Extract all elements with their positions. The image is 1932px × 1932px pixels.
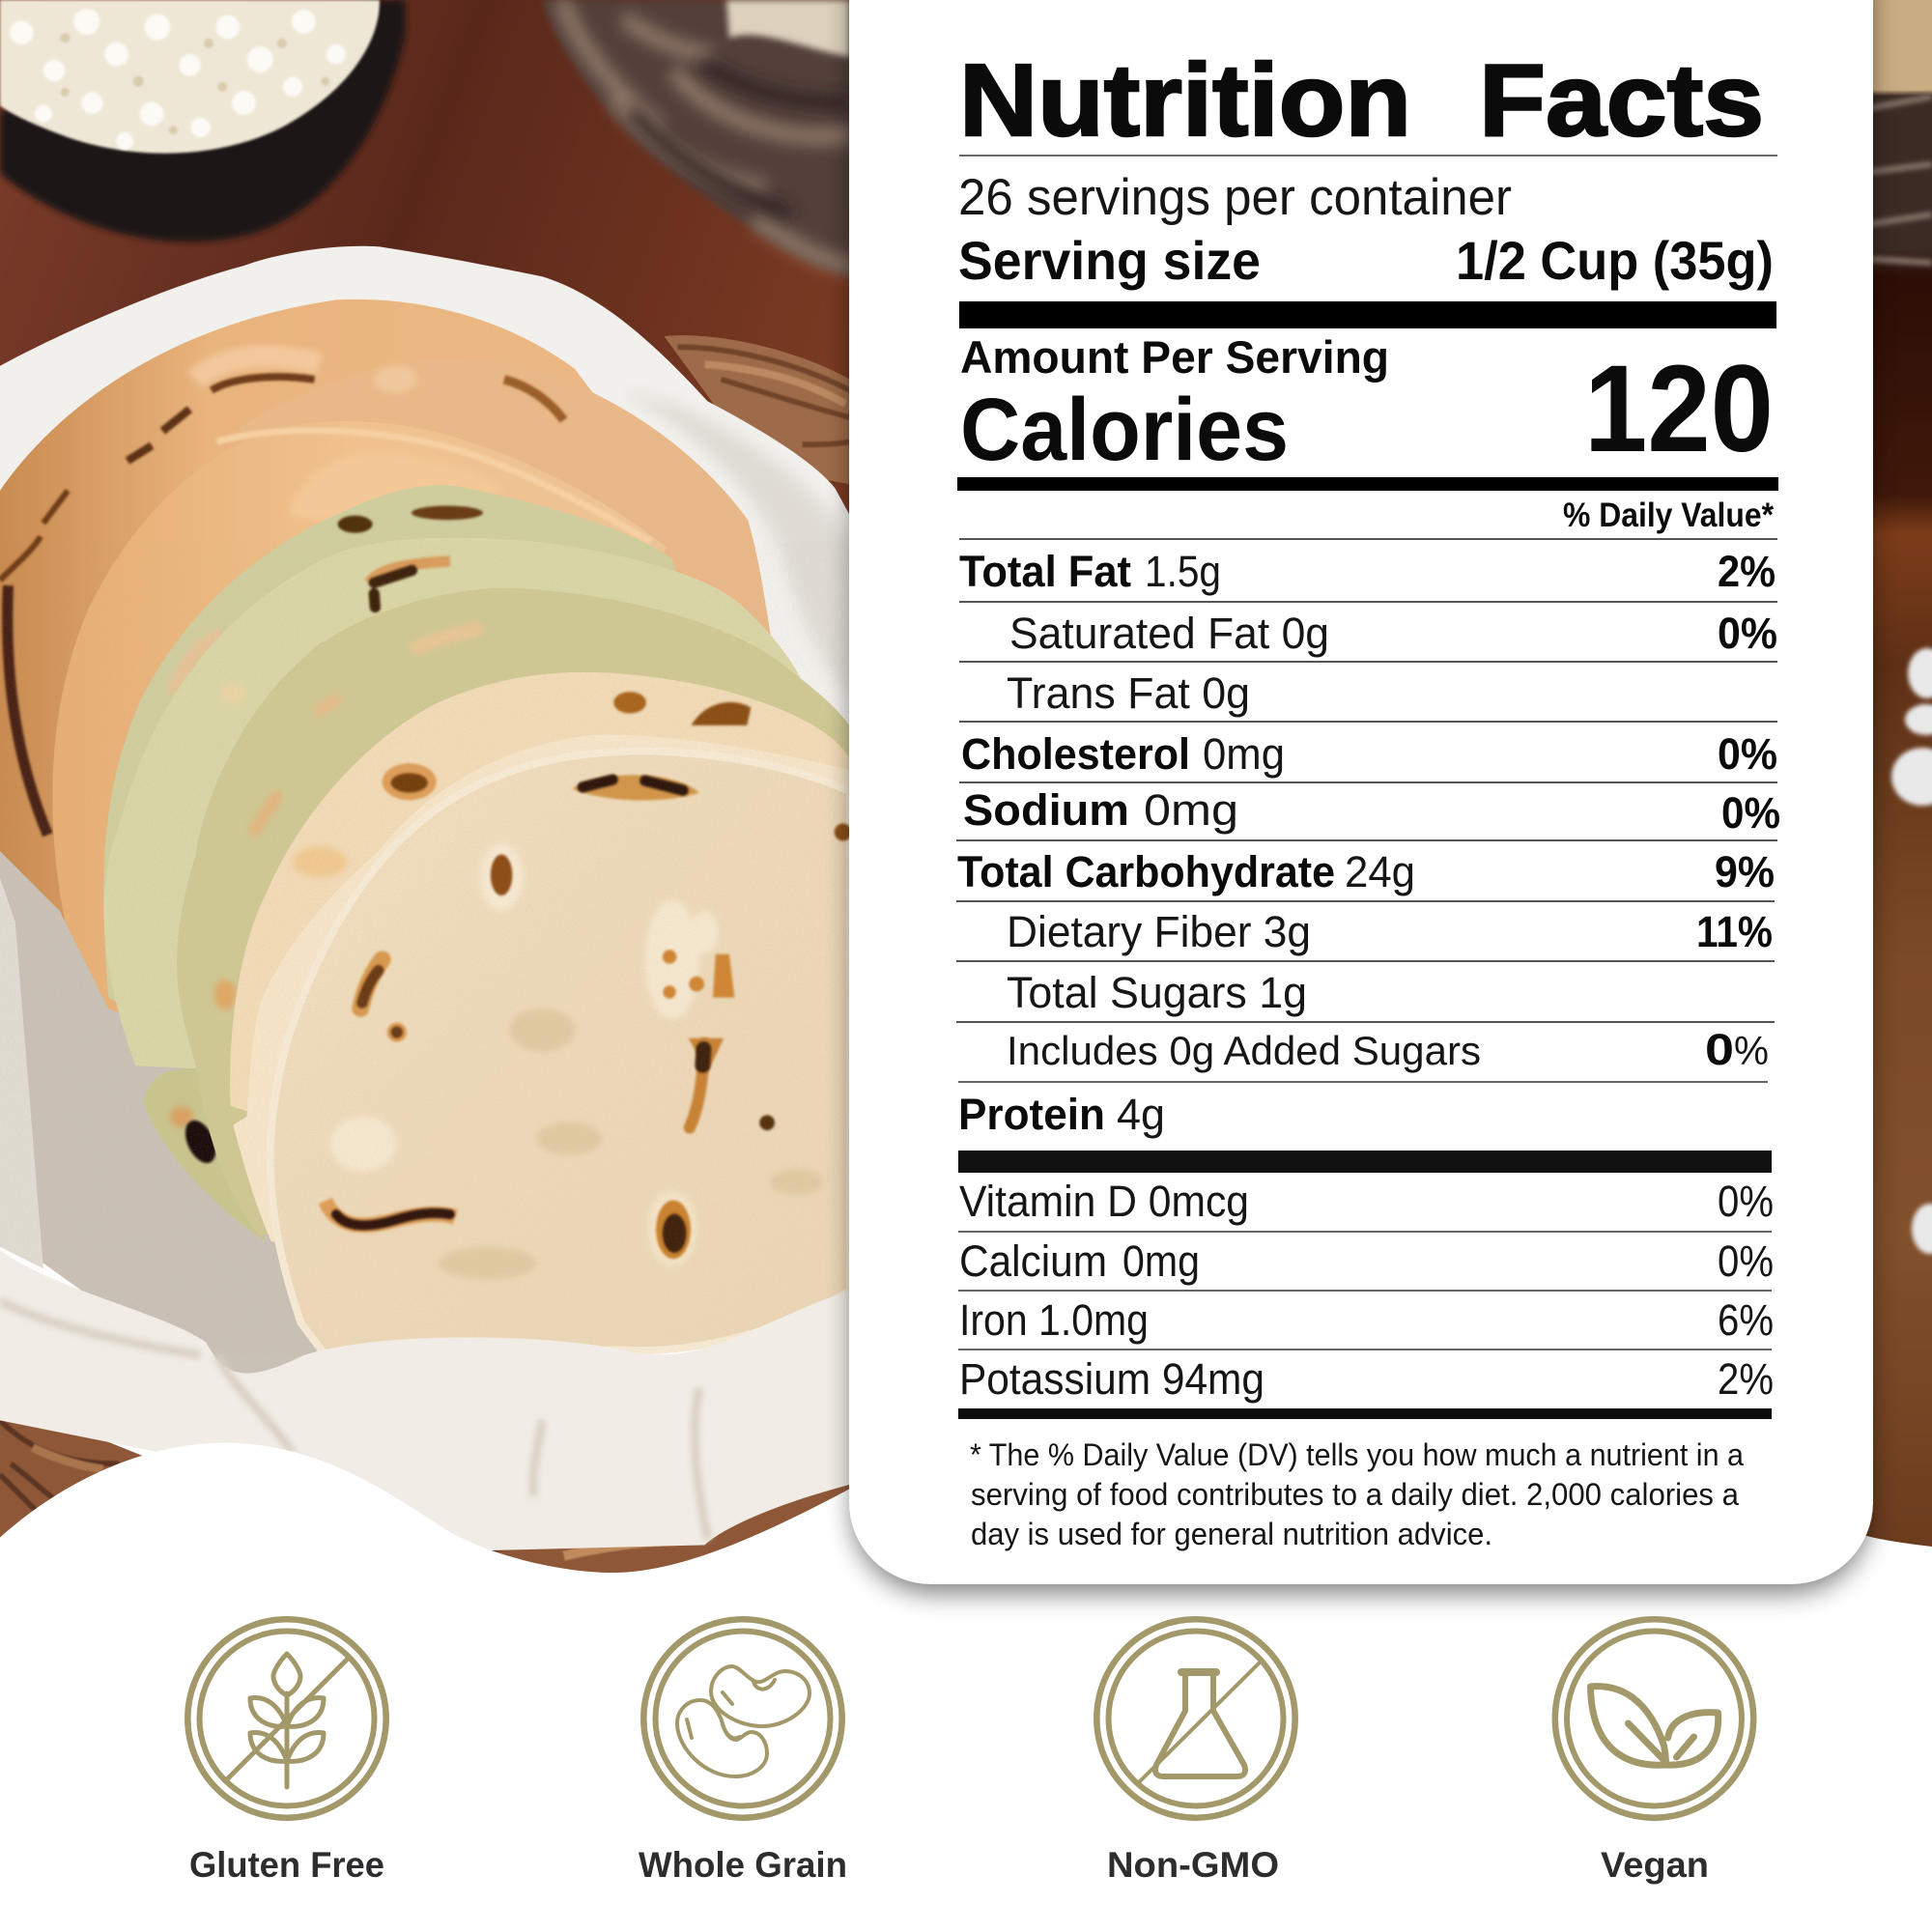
row: total fat — [959, 547, 1776, 596]
row: calcium: 0% — [1718, 1236, 1774, 1286]
row: sodium — [963, 785, 1780, 838]
row: saturated fat: Saturated Fat 0g — [1009, 609, 1329, 658]
row: dietary fiber: 11% — [1696, 907, 1773, 956]
small green tortilla with burn — [144, 1068, 266, 1241]
title — [959, 43, 1764, 157]
row: iron: Iron 1.0mg — [959, 1295, 1149, 1345]
row: cholesterol: 0% — [1718, 729, 1777, 779]
calories: Calories — [960, 381, 1289, 479]
front cloth liner — [0, 1250, 867, 1550]
row: total carbohydrate: 9% — [1715, 847, 1775, 896]
icon: non-gmo flask — [1096, 1619, 1295, 1818]
icon: vegan leaves — [1555, 1619, 1753, 1818]
row: saturated fat: 0% — [1718, 609, 1777, 658]
row: dietary fiber — [1007, 907, 1773, 956]
third green tortilla — [177, 588, 850, 1236]
nutrition card drop shadow — [851, 0, 1871, 1594]
footnote — [970, 1437, 1744, 1551]
row: cholesterol: Cholesterol — [961, 729, 1190, 779]
row: sodium: 0mg — [1144, 785, 1238, 835]
row: calcium: 0mg — [1122, 1236, 1200, 1286]
woven basket, front rim — [0, 1420, 849, 1573]
tortilla grain texture — [0, 542, 850, 1355]
calories — [960, 340, 1774, 479]
daily value header: % Daily Value* — [1563, 497, 1774, 534]
blurred basket in the background — [542, 0, 867, 276]
cloth shading near the tortillas — [641, 396, 849, 689]
panel: nutrition facts card — [849, 0, 1873, 1584]
shaded inner cloth — [0, 851, 318, 1374]
footnote: serving of food contributes to a daily diet. 2,000 calories a — [971, 1477, 1739, 1512]
row: total fat: 2% — [1718, 547, 1776, 596]
row: calcium — [959, 1236, 1774, 1286]
woven basket rim, right side — [665, 335, 849, 485]
row: added sugars — [1007, 1025, 1769, 1074]
footnote: * The % Daily Value (DV) tells you how much a nutrient in a — [970, 1437, 1744, 1472]
amount per serving: Amount Per Serving — [960, 331, 1389, 383]
label: non-gmo: Non-GMO — [1107, 1845, 1279, 1885]
row: cholesterol — [961, 729, 1777, 779]
back orange tortilla — [0, 299, 593, 1012]
row: trans fat: Trans Fat 0g — [1007, 668, 1250, 718]
row: protein: Protein — [958, 1090, 1105, 1139]
white cloth liner, back — [0, 245, 849, 725]
row: protein: 4g — [1117, 1090, 1165, 1139]
photo: basket of corn tortillas on a wooden table — [0, 0, 895, 1681]
row: total fat: Total Fat — [959, 547, 1131, 596]
third orange tortilla — [52, 421, 667, 1030]
icon: whole grain beans — [643, 1619, 842, 1818]
row: potassium: 2% — [1718, 1354, 1774, 1404]
row: total carbohydrate: Total Carbohydrate — [957, 847, 1335, 896]
white wave divider — [0, 1443, 867, 1600]
left cloth fold — [0, 878, 43, 1268]
servings per container: 26 servings per container — [958, 169, 1512, 226]
row: vitamin d: 0% — [1718, 1177, 1774, 1226]
row: saturated fat — [1009, 609, 1777, 658]
row: sodium: Sodium — [963, 785, 1129, 835]
photo: right edge strip with wood and white pearls — [1860, 0, 1932, 1547]
row: sodium: 0% — [1721, 788, 1780, 838]
calories: 120 — [1584, 340, 1774, 478]
serving size: 1/2 Cup (35g) — [1456, 230, 1774, 291]
row: vitamin d — [959, 1177, 1774, 1226]
row: added sugars: 0 — [1705, 1025, 1734, 1074]
serving size: Serving size — [958, 230, 1261, 291]
middle pale tortilla — [233, 734, 849, 1242]
title: Nutrition — [959, 43, 1411, 157]
row: dietary fiber: Dietary Fiber 3g — [1007, 907, 1311, 956]
first pale tortilla — [230, 672, 849, 1111]
black bowl of grated cheese — [0, 0, 406, 242]
row: iron — [959, 1295, 1774, 1345]
row: total fat: 1.5g — [1145, 547, 1221, 596]
second orange tortilla — [240, 363, 771, 636]
row: potassium — [959, 1354, 1774, 1404]
label: vegan: Vegan — [1601, 1845, 1709, 1885]
row: calcium: Calcium — [959, 1236, 1107, 1286]
label: gluten free: Gluten Free — [189, 1845, 384, 1885]
row: vitamin d: Vitamin D 0mcg — [959, 1177, 1249, 1226]
serving size — [958, 230, 1774, 291]
row: added sugars: Includes 0g Added Sugars — [1007, 1028, 1481, 1073]
title: Facts — [1479, 43, 1764, 157]
row: iron: 6% — [1718, 1295, 1774, 1345]
row: cholesterol: 0mg — [1203, 729, 1285, 779]
row: potassium: Potassium 94mg — [959, 1354, 1264, 1404]
first green tortilla — [103, 485, 675, 1001]
icon: gluten free wheat — [187, 1619, 386, 1818]
row: total carbohydrate: 24g — [1345, 847, 1415, 896]
footnote: day is used for general nutrition advice. — [971, 1517, 1492, 1551]
row: added sugars: % — [1734, 1028, 1769, 1073]
row: total carbohydrate — [957, 847, 1775, 896]
label: whole grain: Whole Grain — [639, 1845, 847, 1885]
front pale tortilla with char marks — [270, 751, 852, 1355]
wooden table — [0, 0, 849, 514]
row: total sugars: Total Sugars 1g — [1007, 968, 1307, 1017]
second green tortilla — [104, 538, 803, 1084]
